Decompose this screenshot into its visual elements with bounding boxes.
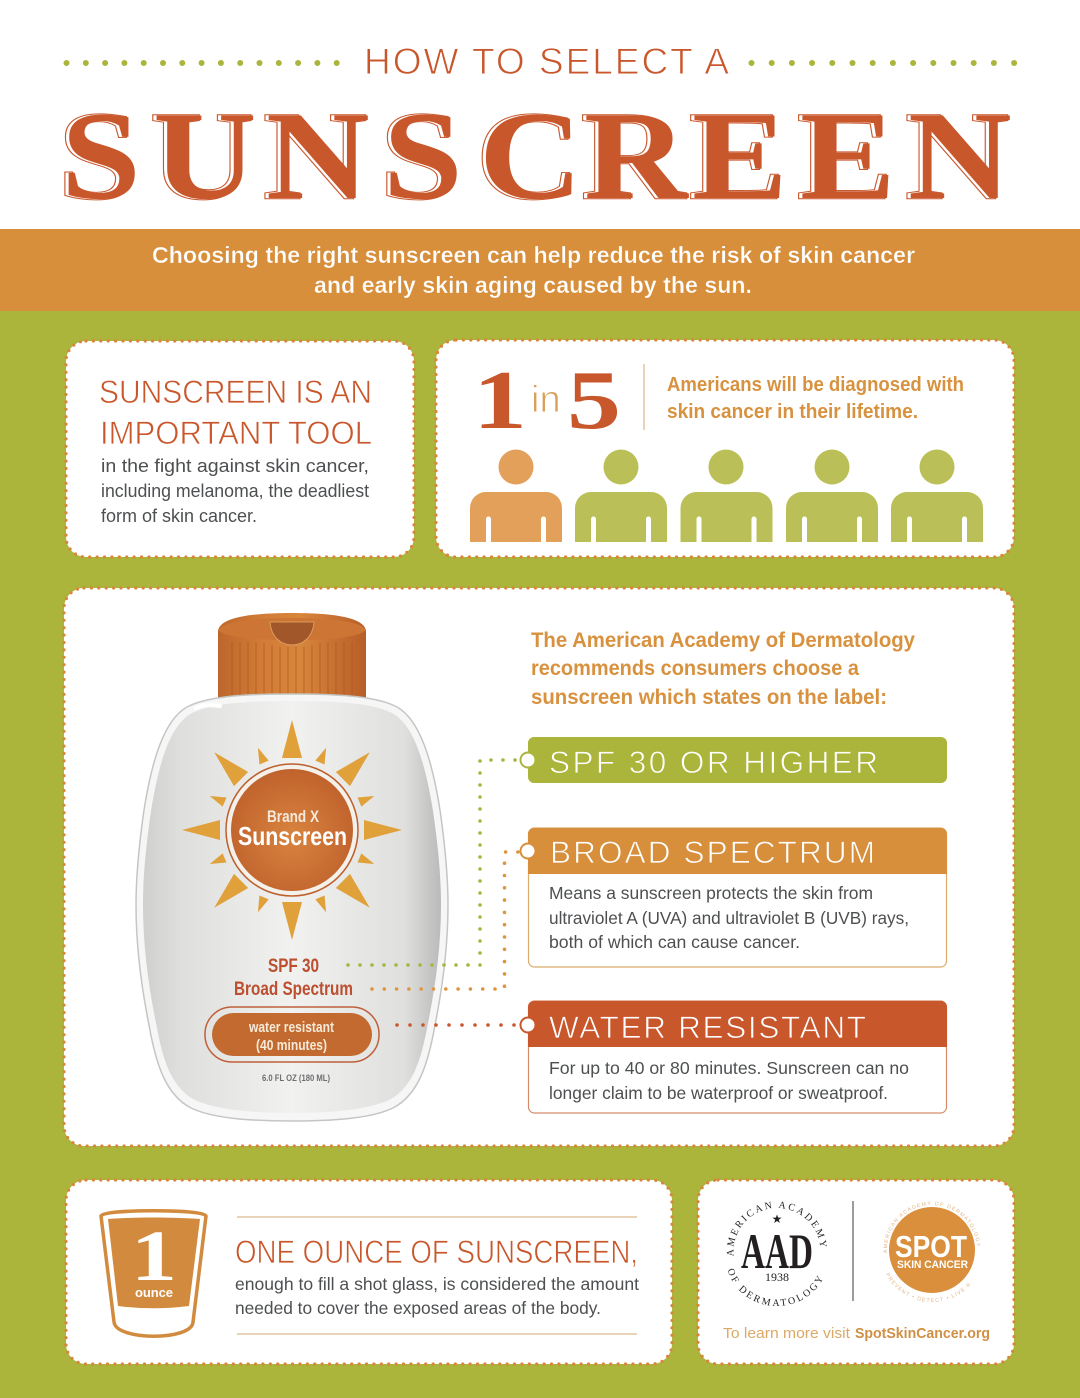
panel: sunscreen is an important tool: SUNSCREEN IS AN bbox=[99, 374, 372, 410]
orange banner bbox=[0, 229, 1080, 311]
callout: broad spectrum: Means a sunscreen protects the skin from bbox=[549, 883, 873, 903]
website link text bbox=[723, 1325, 990, 1342]
logo: american academy of dermatology: OF DERMATOLOGY bbox=[728, 1268, 822, 1306]
title: sunscreen: SUNSCREEN bbox=[58, 87, 1009, 226]
logo: spot skin cancer: SPOT bbox=[895, 1229, 967, 1264]
bottle label: water resistant pill: water resistant bbox=[248, 1020, 334, 1036]
logo: spot skin cancer: PREVENT • DETECT • LIVE ® bbox=[886, 1272, 970, 1302]
icon: person 4 bbox=[786, 450, 878, 542]
statistic caption: skin cancer in their lifetime. bbox=[667, 401, 918, 423]
illustration: sunscreen bottle bbox=[136, 613, 448, 1121]
icon: shot glass: 1 bbox=[131, 1216, 177, 1296]
icon: person highlighted bbox=[470, 450, 562, 542]
callout: broad spectrum: ultraviolet A (UVA) and ultraviolet B (UVB) rays, bbox=[549, 908, 909, 928]
one ounce text: needed to cover the exposed areas of the body. bbox=[235, 1298, 601, 1318]
recommendation heading: recommends consumers choose a bbox=[531, 656, 860, 680]
header: how to select a: HOW TO SELECT A bbox=[364, 41, 729, 82]
title: sunscreen: SUNSCREEN bbox=[61, 87, 1012, 226]
panel: sunscreen is an important tool: including melanoma, the deadliest bbox=[101, 481, 369, 501]
one ounce text: ONE OUNCE OF SUNSCREEN, bbox=[235, 1234, 638, 1270]
panel: one ounce bbox=[66, 1180, 672, 1364]
logo: spot skin cancer bbox=[883, 1202, 980, 1302]
bottle label: spf: Broad Spectrum bbox=[234, 979, 353, 1000]
one in five numerals: 5 bbox=[567, 354, 621, 447]
sun disc with brand: Brand X bbox=[267, 807, 320, 826]
callout: water resistant: WATER RESISTANT bbox=[549, 1009, 866, 1045]
icon: shot glass: ounce bbox=[135, 1285, 173, 1300]
icon: person 5 bbox=[891, 450, 983, 542]
one ounce text: enough to fill a shot glass, is considered the amount bbox=[235, 1274, 639, 1294]
callout: broad spectrum: both of which can cause cancer. bbox=[549, 932, 800, 952]
panel: sunscreen is an important tool: in the fight against skin cancer, bbox=[101, 456, 369, 476]
statistic caption: Americans will be diagnosed with bbox=[667, 374, 964, 396]
panel: logos bbox=[696, 1178, 1016, 1366]
panel: sunscreen is an important tool bbox=[66, 341, 414, 557]
one in five numerals: in bbox=[531, 379, 561, 421]
website link text: To learn more visit bbox=[723, 1325, 851, 1342]
website link text: SpotSkinCancer.org bbox=[855, 1325, 990, 1342]
bottle label: volume: 6.0 FL OZ (180 ML) bbox=[262, 1073, 330, 1084]
connector: broad spectrum bbox=[372, 852, 520, 989]
callout: water resistant bbox=[520, 1001, 947, 1113]
one ounce text bbox=[235, 1234, 639, 1318]
icon: shot glass bbox=[101, 1211, 206, 1336]
panel: 1 in 5 statistic bbox=[436, 340, 1014, 557]
bottle label: water resistant pill bbox=[205, 1007, 379, 1062]
bottle label: spf: SPF 30 bbox=[268, 956, 319, 977]
statistic caption bbox=[667, 374, 964, 423]
icon: person 2 bbox=[575, 450, 667, 542]
connector: water resistant bbox=[397, 1023, 520, 1027]
logo: american academy of dermatology: AAD bbox=[741, 1223, 813, 1279]
callout: spf 30 or higher bbox=[520, 737, 947, 783]
panel: sunscreen is an important tool: IMPORTANT TOOL bbox=[100, 415, 372, 451]
logo: american academy of dermatology: 1938 bbox=[765, 1270, 789, 1284]
sun disc with brand: Sunscreen bbox=[238, 821, 347, 851]
recommendation heading bbox=[531, 628, 915, 709]
orange banner: and early skin aging caused by the sun. bbox=[314, 272, 752, 298]
callout: spf 30 or higher: SPF 30 OR HIGHER bbox=[549, 744, 878, 780]
sun disc with brand bbox=[226, 764, 358, 896]
panel: label recommendations bbox=[64, 588, 1014, 1146]
one in five numerals: 1 bbox=[473, 354, 527, 447]
panel: sunscreen is an important tool: form of skin cancer. bbox=[101, 506, 257, 526]
bottle label: water resistant pill: (40 minutes) bbox=[256, 1038, 327, 1054]
bottle label: spf bbox=[234, 956, 353, 1000]
callout: broad spectrum bbox=[520, 828, 947, 967]
one in five numerals bbox=[473, 354, 621, 447]
logo: american academy of dermatology bbox=[726, 1202, 827, 1306]
icon: person 3 bbox=[680, 450, 772, 542]
bottle cap bbox=[218, 613, 366, 700]
green background bbox=[0, 311, 1080, 1398]
logo: american academy of dermatology: ★ bbox=[772, 1212, 782, 1226]
connector: spf bbox=[348, 760, 520, 965]
orange banner: Choosing the right sunscreen can help reduce the risk of skin cancer bbox=[152, 242, 915, 268]
logo: spot skin cancer: SKIN CANCER bbox=[897, 1259, 968, 1271]
logo: spot skin cancer: AMERICAN ACADEMY OF DERMATOLOGY bbox=[883, 1202, 980, 1254]
recommendation heading: The American Academy of Dermatology bbox=[531, 628, 915, 652]
bottle body bbox=[136, 694, 448, 1121]
logo: american academy of dermatology: AMERICAN ACADEMY bbox=[726, 1202, 827, 1256]
title: sunscreen: SUNSCREEN bbox=[58, 87, 1009, 226]
callout: broad spectrum: BROAD SPECTRUM bbox=[550, 834, 875, 870]
callout: water resistant: longer claim to be waterproof or sweatproof. bbox=[549, 1083, 888, 1103]
callout: water resistant: For up to 40 or 80 minutes. Sunscreen can no bbox=[549, 1058, 909, 1078]
sun rays bbox=[182, 720, 402, 940]
recommendation heading: sunscreen which states on the label: bbox=[531, 685, 887, 709]
